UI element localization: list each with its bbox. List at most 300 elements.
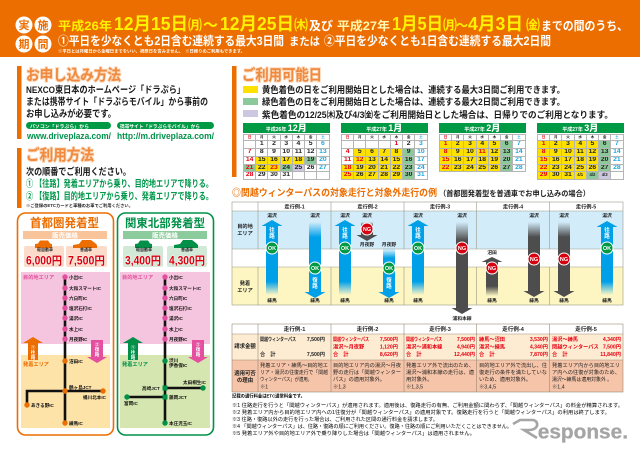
- route labels: 練馬: [267, 297, 277, 304]
- table headings: 走行例-2: [357, 325, 378, 333]
- link: mobile site: http://m.driveplaza.com/: [117, 131, 214, 142]
- header footnote: ※平日とは月曜日から金曜日までをいい、祝祭日を含みません。 ※日帰りのご利用もできます。: [58, 48, 245, 54]
- calendar: January 2015: 土: [419, 135, 423, 139]
- route map: 六日町IC: [169, 295, 188, 302]
- calendar: February 2015: 木: [493, 135, 496, 139]
- notes: ※3 往路・復路以外の走行を行った場合は、ご利用された区間の通行料金を請求します。: [232, 415, 438, 423]
- direction text in arrows: 路: [269, 232, 275, 240]
- route labels: 練馬: [559, 297, 569, 304]
- reasons: いため、適用対象外。: [479, 375, 531, 383]
- reasons: 湯沢～浦和本線の走行は、適: [406, 368, 475, 376]
- reasons: 発着エリア・練馬～目的地エ: [260, 361, 328, 369]
- route labels: [267, 212, 612, 322]
- fares example 1: [260, 335, 325, 358]
- reasons: 目的地エリア内の湯沢～月夜: [333, 361, 402, 369]
- NG badges: NG: [363, 227, 371, 233]
- route map: 伊香保IC: [169, 362, 188, 369]
- route map: 六日町IC: [69, 295, 88, 302]
- arrow: outbound: 往: [131, 349, 136, 355]
- fares example 4: [479, 335, 548, 358]
- heading: example routes: （首都圏発着型を普通車でお申し込みの場合）: [439, 188, 590, 198]
- arrow: return: ②: [95, 341, 100, 348]
- icon: period badges: 期: [18, 37, 30, 51]
- calendar: March 2015: 土: [615, 135, 619, 139]
- direction text in arrows: 往: [269, 226, 275, 234]
- fares example 5: 関越ウィンターパス: [552, 342, 599, 350]
- price: regular car: 7,500円: [68, 254, 105, 268]
- row heads: の理由: [237, 376, 253, 384]
- route labels: 練馬: [340, 297, 350, 304]
- calendar: January 2015: 木: [395, 135, 398, 139]
- date line: 1月5日: [392, 14, 443, 34]
- reasons: ※1,4: [552, 384, 565, 390]
- date line: 平成27年: [337, 18, 390, 33]
- NG badges: NG: [560, 257, 568, 263]
- fares example 2: 8,620円: [380, 351, 398, 358]
- column headings: 走行例-1: [284, 203, 305, 211]
- calendar: December 2014: 月: [260, 135, 264, 139]
- calendar: December 2014: [243, 123, 330, 180]
- route labels: 練馬: [384, 297, 394, 304]
- route map: 沼田IC: [69, 358, 83, 365]
- route labels: 練馬: [413, 297, 423, 304]
- price: regular car: 普通車: [181, 246, 193, 252]
- NG badges: NG: [488, 266, 496, 272]
- calendar: March 2015: 4/3: [602, 172, 608, 177]
- date line: 4月3日: [468, 14, 523, 34]
- price label: [23, 230, 107, 240]
- area labels: 発着エリア: [23, 360, 49, 368]
- fares example 1: 7,500円: [307, 351, 325, 358]
- fares example 4: 3,530円: [530, 336, 548, 343]
- link: PC site: www.driveplaza.com/: [26, 131, 111, 142]
- route map: [24, 274, 107, 427]
- row labels: 目的地: [237, 222, 254, 230]
- route labels: 月夜野: [360, 241, 374, 248]
- NG badges: [360, 222, 570, 274]
- steps: ① 【往路】発着エリアから乗り、目的地エリアで降りる。: [26, 178, 213, 190]
- direction text in arrows: 往: [342, 226, 348, 234]
- date line: ～: [456, 18, 468, 33]
- legend: 黄色着色の日をご利用開始日とした場合は、連続する最大3日間ご利用できます。: [262, 84, 565, 95]
- text block: application: または携帯サイト「ドラぷらモバイル」から事前の: [26, 96, 208, 108]
- route map: 塩沢石打IC: [169, 305, 193, 312]
- departure area: [21, 355, 110, 428]
- reasons: ウィンターパス」が適用。: [260, 375, 312, 383]
- departure area: [120, 355, 210, 428]
- notes: ※5 発着エリア外や目的地エリア外で乗り降りした場合は「関越ウィンターパス」は適用されません。: [232, 429, 475, 437]
- route map: 月夜野IC: [169, 336, 188, 343]
- calendar: December 2014: 平成26年 12月: [266, 123, 307, 133]
- panel: northern Kanto type: [118, 213, 214, 435]
- panel: available dates: [232, 66, 613, 177]
- calendar: February 2015: 平成27年 2月: [464, 123, 500, 133]
- date line: 及び: [309, 19, 333, 33]
- fares example 5: 合 計: [552, 350, 568, 358]
- table headings: 走行例-5: [575, 325, 597, 333]
- fares example 3: 関越ウィンターパス: [406, 335, 442, 343]
- icon: period badges: [16, 16, 52, 52]
- conditions line: ①平日を少なくとも2日含む連続する最大3日間: [58, 33, 284, 48]
- date line: 12月15日: [114, 14, 188, 34]
- price label: 販売価格: [152, 230, 178, 240]
- fares example 5: 4,340円: [603, 336, 621, 343]
- table headings: 走行例-3: [429, 325, 451, 333]
- calendar: January 2015: 火: [370, 135, 374, 139]
- table headings: [284, 325, 597, 333]
- title: 関東北部発着型: [125, 216, 205, 230]
- arrow: outbound: [123, 337, 143, 361]
- fares example 2: 合 計: [333, 350, 349, 358]
- destination area: [21, 272, 110, 344]
- fares example 2: 1,120円: [380, 344, 398, 350]
- OK badges: OK: [268, 246, 276, 252]
- row labels: [237, 222, 254, 294]
- fares example 2: [333, 335, 398, 358]
- reasons: ア内への往復が対象のため、: [552, 368, 620, 376]
- arrow: return: 路: [95, 351, 100, 358]
- OK badges: OK: [311, 266, 319, 272]
- fares example 4: 4,340円: [530, 344, 548, 350]
- link: PC site: パソコン「ドラぷら」から: [30, 123, 89, 130]
- route map: 高崎JCT: [142, 385, 160, 392]
- notes: 記載の通行料金はETC通常料金です。: [232, 392, 305, 400]
- calendar: February 2015: 日: [444, 135, 447, 139]
- panel: how to use: [17, 146, 213, 209]
- calendar: January 2015: 平成27年 1月: [366, 123, 402, 133]
- date line: ㈪: [188, 17, 202, 33]
- route map: 渋川: [169, 357, 179, 364]
- route labels: 湯沢: [457, 212, 467, 219]
- price: kei car: [24, 240, 64, 268]
- legend: 緑色着色の日をご利用開始日とした場合は、連続する最大2日間ご利用できます。: [262, 96, 565, 107]
- reasons: 復走行の条件を満たしていな: [479, 368, 547, 376]
- legend: 紫色着色の12/25㈭及び4/3㈮をご利用開始日とした場合は、日帰りでのご利用となります。: [262, 109, 613, 120]
- price: regular car: 4,300円: [169, 254, 205, 268]
- fares example 3: 4,940円: [457, 344, 475, 350]
- route labels: 浦和本線: [452, 315, 472, 322]
- calendar: February 2015: 月: [456, 135, 460, 139]
- calendar: February 2015: 金: [505, 135, 508, 139]
- route labels: 月夜野: [382, 241, 396, 248]
- destination area: [120, 272, 210, 344]
- date line: [58, 14, 628, 34]
- row labels: 発着: [240, 279, 250, 287]
- route labels: 練馬: [602, 297, 612, 304]
- table: fare and reasons: [232, 324, 623, 392]
- calendar: March 2015: 火: [566, 135, 570, 139]
- row heads: [234, 342, 256, 384]
- watermark: Response logo: Response.: [537, 422, 628, 444]
- OK badges: [266, 242, 614, 274]
- calendar: March 2015: 木: [591, 135, 594, 139]
- text block: application: お申し込みが必要です。: [26, 108, 116, 120]
- fares example 5: [552, 335, 621, 358]
- calendar: March 2015: 4/2: [590, 172, 595, 177]
- fares example 3: 合 計: [406, 350, 422, 358]
- direction text in arrows: 往: [415, 226, 421, 234]
- NG badges: NG: [458, 246, 466, 252]
- route map: 小出IC: [169, 274, 183, 281]
- date line: までの間のうち、: [541, 19, 628, 33]
- route labels: 湯沢: [267, 212, 277, 219]
- arrow: return: 路: [196, 351, 201, 358]
- direction text in arrows: 復: [386, 276, 392, 284]
- direction text in arrows: 復: [312, 276, 318, 284]
- column headings: 走行例-3: [430, 203, 450, 211]
- price label: 販売価格: [52, 230, 78, 240]
- area labels: [23, 273, 54, 368]
- conditions line: または: [289, 35, 320, 48]
- date line: 12月25日: [220, 14, 294, 34]
- date line: ㈮: [526, 17, 540, 33]
- chart: route diagram: [232, 202, 623, 322]
- fares example 3: 7,500円: [457, 336, 475, 343]
- direction text in arrows: [269, 226, 610, 290]
- route map: 藤岡JCT: [169, 394, 187, 401]
- fares example 1: 合 計: [260, 350, 276, 358]
- calendar: December 2014: 日: [248, 135, 251, 139]
- conditions line: [58, 33, 551, 48]
- fares example 4: 7,870円: [530, 351, 548, 358]
- text block: application: NEXCO東日本のホームページ「ドラぷら」: [26, 84, 185, 96]
- calendar: January 2015: 月: [358, 135, 362, 139]
- fares example 4: 練馬～沼田: [479, 335, 505, 343]
- route map: 太田桐生IC: [183, 379, 207, 386]
- price: regular car: [66, 240, 107, 268]
- fares example 5: 7,500円: [603, 344, 621, 350]
- column headings: [284, 203, 596, 211]
- area labels: 目的地エリア: [122, 273, 153, 281]
- route map: あきる野IC: [31, 402, 55, 409]
- calendar: March 2015: 月: [554, 135, 558, 139]
- panel: how to apply: [17, 66, 214, 142]
- panel: Tokyo metropolitan type: [18, 213, 114, 435]
- route labels: 練馬: [529, 297, 539, 304]
- reasons: ※1: [260, 384, 268, 390]
- route map: 小出IC: [69, 274, 83, 281]
- route labels: 沼田: [487, 249, 497, 256]
- arrows: gray not applicable: [356, 222, 574, 314]
- route labels: 練馬: [487, 297, 497, 304]
- calendar: March 2015: 金: [603, 135, 606, 139]
- route labels: 練馬: [310, 297, 320, 304]
- route labels: 湯沢: [413, 212, 423, 219]
- arrow: return: ②: [196, 341, 201, 348]
- calendar: December 2014: 火: [272, 135, 276, 139]
- arrows: blue outbound and return: [262, 220, 618, 298]
- steps: [26, 178, 213, 202]
- route map: 桶川北本IC: [83, 394, 107, 401]
- fares example 2: 湯沢～月夜野: [333, 342, 365, 350]
- area labels: 発着エリア: [122, 360, 148, 368]
- route map: 湯沢IC: [69, 315, 83, 322]
- calendar: March 2015: [537, 123, 624, 180]
- notes: [232, 392, 623, 437]
- conditions line: ②平日を少なくとも1日含む連続する最大2日間: [324, 33, 551, 48]
- date line: ～: [203, 17, 218, 34]
- reasons: 湯沢～練馬は適用対象外 。: [552, 375, 612, 383]
- OK badges: OK: [341, 246, 349, 252]
- fares example 4: 湯沢～練馬: [479, 342, 505, 350]
- reasons: 用対象外。: [406, 375, 432, 383]
- route map: 水上IC: [169, 326, 183, 332]
- text block: order of use: 次の順番でご利用ください。: [26, 166, 131, 178]
- notes: ※4 「関越ウィンターパス」は、往路・復路の順にご利用ください。復路・往路の順にご利用いただくことはできません。: [232, 422, 512, 430]
- direction text in arrows: 路: [386, 282, 392, 290]
- direction text in arrows: 路: [415, 232, 421, 240]
- fares example 3: [406, 335, 475, 358]
- calendar: January 2015: 金: [407, 135, 410, 139]
- calendar: March 2015: 日: [542, 135, 545, 139]
- fares example 3: 湯沢～浦和本線: [406, 342, 443, 350]
- date line: ㈭: [294, 17, 308, 33]
- legend: [243, 84, 613, 120]
- fares example 3: 12,440円: [454, 351, 475, 358]
- date line: ㈪: [443, 17, 457, 33]
- arrow: outbound: 路: [31, 354, 36, 361]
- calendar: January 2015: 水: [382, 135, 386, 139]
- date line: 平成26年: [58, 18, 112, 33]
- reasons: [260, 361, 620, 390]
- header band: implementation period: [0, 0, 640, 57]
- heading: how to apply: お申し込み方法: [26, 66, 121, 84]
- link: mobile site: 携帯サイト「ドラぷらモバイル」から: [120, 123, 200, 130]
- route labels: 湯沢: [362, 212, 372, 219]
- reasons: ※3,4,5: [479, 384, 496, 390]
- calendar: January 2015: 日: [346, 135, 349, 139]
- fares example 5: 湯沢～練馬: [552, 335, 578, 343]
- route map: 月夜野IC: [69, 336, 88, 343]
- calendar: March 2015: 水: [578, 135, 582, 139]
- calendar: February 2015: 水: [480, 135, 484, 139]
- calendar: January 2015: [341, 123, 428, 180]
- route labels: 湯沢: [529, 212, 539, 219]
- arrow: outbound: ①: [131, 344, 136, 351]
- arrow: return: 復: [196, 346, 201, 352]
- icon: period badges: 実: [18, 18, 30, 32]
- reasons: ※1,3: [333, 384, 346, 390]
- arrow: return: [188, 340, 208, 363]
- price: kei car: 軽自動車: [136, 246, 152, 252]
- reasons: パス」の適用対象外。: [333, 375, 385, 383]
- calendar: February 2015: 土: [517, 135, 521, 139]
- direction text in arrows: 路: [342, 232, 348, 240]
- direction text in arrows: 路: [312, 282, 318, 290]
- notes: ※1 往路走行を行うと「関越ウィンターパス」が適用されます。適用後は、復路走行の有無、ご利用金額に関わらず、「関越ウィンターパス」の料金が精算されます。: [232, 401, 623, 409]
- calendar: December 2014: 土: [321, 135, 325, 139]
- reasons: ※1,3,5: [406, 384, 423, 390]
- arrow: outbound: 往: [31, 349, 36, 355]
- route map: 湯沢IC: [169, 315, 183, 322]
- fares example 5: 11,840円: [600, 351, 621, 358]
- route map: 鶴ヶ島JCT: [69, 384, 92, 391]
- route map: 富岡IC: [124, 400, 138, 407]
- price: regular car: [167, 240, 207, 268]
- title: 首都圏発着型: [30, 215, 99, 230]
- route map: 大和スマートIC: [169, 285, 202, 292]
- note: ※ご登録のETCカードと車種のお車でご利用ください。: [26, 202, 133, 209]
- calendar: February 2015: 火: [468, 135, 472, 139]
- reasons: リア・湯沢の往復走行で「関越: [260, 368, 329, 376]
- reasons: 目的地エリア外で流出し、往: [479, 361, 548, 369]
- area labels: 目的地エリア: [23, 273, 54, 281]
- calendar: December 2014: 水: [284, 135, 288, 139]
- row heads: 請求金額: [234, 342, 256, 350]
- column headings: 走行例-5: [576, 203, 596, 211]
- link: mobile site: [117, 122, 214, 142]
- arrow: outbound: [23, 337, 43, 361]
- column headings: 走行例-2: [357, 203, 378, 211]
- heading: how to use: ご利用方法: [26, 146, 94, 164]
- arrow: return: [87, 340, 107, 363]
- table headings: 走行例-4: [502, 325, 525, 333]
- calendar: December 2014: 金: [309, 135, 312, 139]
- steps: ② 【復路】目的地エリアから乗り、発着エリアで降りる。: [26, 190, 213, 202]
- fares example 2: 7,500円: [380, 336, 398, 343]
- direction text in arrows: 往: [604, 226, 610, 234]
- table headings: 走行例-1: [284, 325, 305, 333]
- fares example 1: 関越ウィンターパス: [260, 335, 296, 343]
- reasons: 野の走行は「関越ウィンター: [333, 368, 401, 376]
- area labels: [122, 273, 153, 368]
- calendar: March 2015: 平成27年 3月: [562, 123, 598, 133]
- route labels: 湯沢: [340, 212, 350, 219]
- price: kei car: 軽自動車: [37, 246, 53, 252]
- heading: example routes: ◎関越ウィンターパスの対象走行と対象外走行の例: [232, 187, 437, 199]
- link: PC site: [26, 122, 111, 142]
- NG badges: NG: [530, 257, 538, 263]
- calendar: February 2015: [439, 123, 526, 172]
- price label: [123, 230, 207, 240]
- route map: [124, 274, 207, 427]
- price: kei car: [123, 240, 163, 268]
- OK badges: OK: [385, 266, 393, 272]
- text block: application: [26, 84, 208, 120]
- route labels: 湯沢: [602, 212, 612, 219]
- price: kei car: 6,000円: [26, 254, 62, 268]
- route map: 練馬IC: [69, 420, 83, 427]
- row heads: 適用可否: [234, 369, 256, 377]
- reasons: 発着エリア内から目的地エリ: [552, 361, 620, 369]
- route labels: 湯沢: [559, 212, 569, 219]
- route labels: 湯沢: [310, 212, 320, 219]
- notes: ※2 発着エリア内から目的地エリア内への1往復分が「関越ウィンターパス」の適用対象です。復路走行を行うと「関越ウィンターパス」の利用は終了します。: [232, 408, 610, 416]
- arrow: outbound: ①: [31, 344, 36, 351]
- OK badges: OK: [603, 246, 611, 252]
- fares example 2: 関越ウィンターパス: [333, 335, 369, 343]
- icon: period badges: 施: [38, 18, 48, 32]
- OK badges: OK: [414, 246, 422, 252]
- route map: 大和スマートIC: [69, 285, 102, 292]
- direction text in arrows: 路: [604, 232, 610, 240]
- arrow: return: 復: [95, 346, 100, 352]
- calendar: December 2014: 木: [297, 135, 300, 139]
- reasons: 発着エリア外で流出のため、: [406, 361, 474, 369]
- route map: 塩沢石打IC: [69, 305, 93, 312]
- row labels: エリア: [237, 230, 253, 237]
- fares example 1: 7,500円: [307, 336, 325, 343]
- route map: 本庄児玉IC: [169, 420, 193, 427]
- fares example 4: 合 計: [479, 350, 495, 358]
- row labels: エリア: [237, 287, 253, 294]
- column headings: 走行例-4: [503, 203, 523, 211]
- price: kei car: 3,400円: [125, 254, 161, 268]
- heading: available dates: ご利用可能日: [242, 66, 322, 84]
- route map: 水上IC: [69, 326, 83, 332]
- price: regular car: 普通車: [80, 246, 92, 252]
- arrow: outbound: 路: [131, 354, 136, 361]
